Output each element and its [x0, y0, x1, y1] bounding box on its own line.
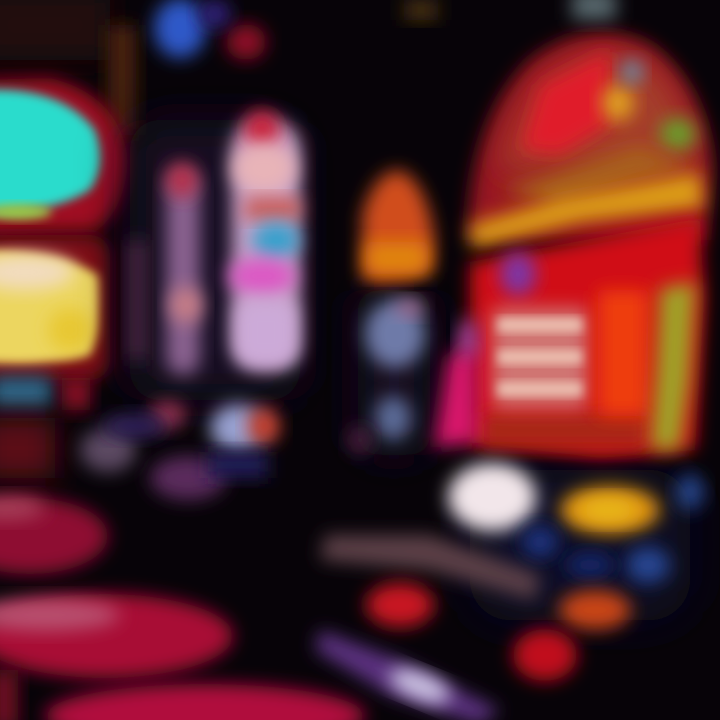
olive strip [650, 282, 696, 450]
dome top [468, 33, 712, 240]
red body [470, 218, 704, 458]
yellow button [560, 486, 660, 534]
purple symbol [500, 252, 536, 296]
narrow column screen [166, 170, 200, 375]
machine control deck [315, 535, 631, 720]
red stool seats [0, 496, 365, 720]
pale reel panel [492, 308, 588, 408]
red buttons [366, 583, 434, 627]
top lights [154, 0, 206, 58]
lower white and purple strip [315, 630, 500, 720]
orange top panel [362, 170, 434, 281]
left slot machine [0, 0, 136, 478]
red jackpot sign [520, 50, 610, 155]
cyan screen [0, 90, 100, 212]
white button [448, 463, 536, 531]
blue buttons [626, 547, 670, 583]
yellow band [470, 172, 704, 248]
magenta side light [434, 335, 478, 448]
lower blue panel [0, 376, 52, 408]
lower controls [210, 404, 266, 452]
third slot machine [348, 0, 438, 455]
right slot machine [434, 33, 712, 620]
yellow screen [0, 250, 99, 364]
orange reel [598, 290, 648, 416]
top fixture above right machine [572, 0, 616, 20]
blue-grey panel [365, 300, 425, 368]
middle slot machines [80, 0, 300, 500]
wide column screen [232, 120, 300, 370]
